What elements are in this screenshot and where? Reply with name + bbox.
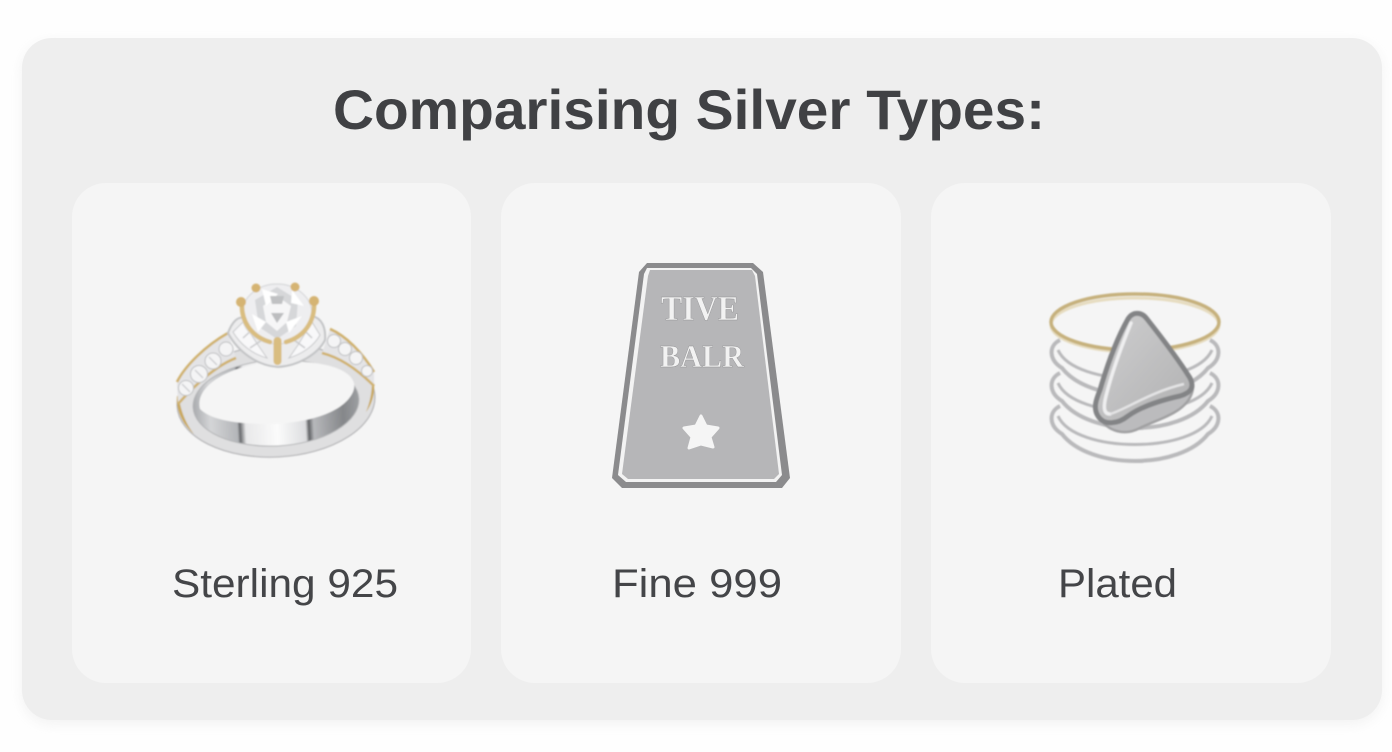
- ring band: [174, 340, 378, 462]
- title: Comparising Silver Types:: [333, 78, 1045, 141]
- label: plated: Plated: [1058, 562, 1177, 606]
- bar engraving: tive: TIVE: [661, 289, 739, 328]
- icon: star: [684, 416, 718, 448]
- right shoulder stones: [322, 329, 374, 386]
- setting basket: [228, 316, 325, 367]
- gold prongs: [242, 302, 314, 361]
- grey stacked rings: [1052, 340, 1218, 461]
- panel: fine 999: [501, 183, 901, 683]
- prong tips: [236, 282, 319, 307]
- left shoulder stones: [177, 333, 236, 404]
- icon: diamond ring: [174, 282, 378, 462]
- nugget: [1095, 313, 1193, 432]
- panel: sterling 925: [72, 183, 471, 683]
- icon: silver bar: [612, 263, 790, 488]
- bar engraving: balr: BALR: [660, 338, 745, 374]
- panel: plated: [931, 183, 1331, 683]
- round diamond: [242, 284, 312, 344]
- label: fine 999: Fine 999: [612, 562, 782, 606]
- gold ring: [1051, 294, 1219, 352]
- icon: plated rings and nugget: [1051, 294, 1219, 461]
- label: sterling 925: Sterling 925: [172, 562, 398, 606]
